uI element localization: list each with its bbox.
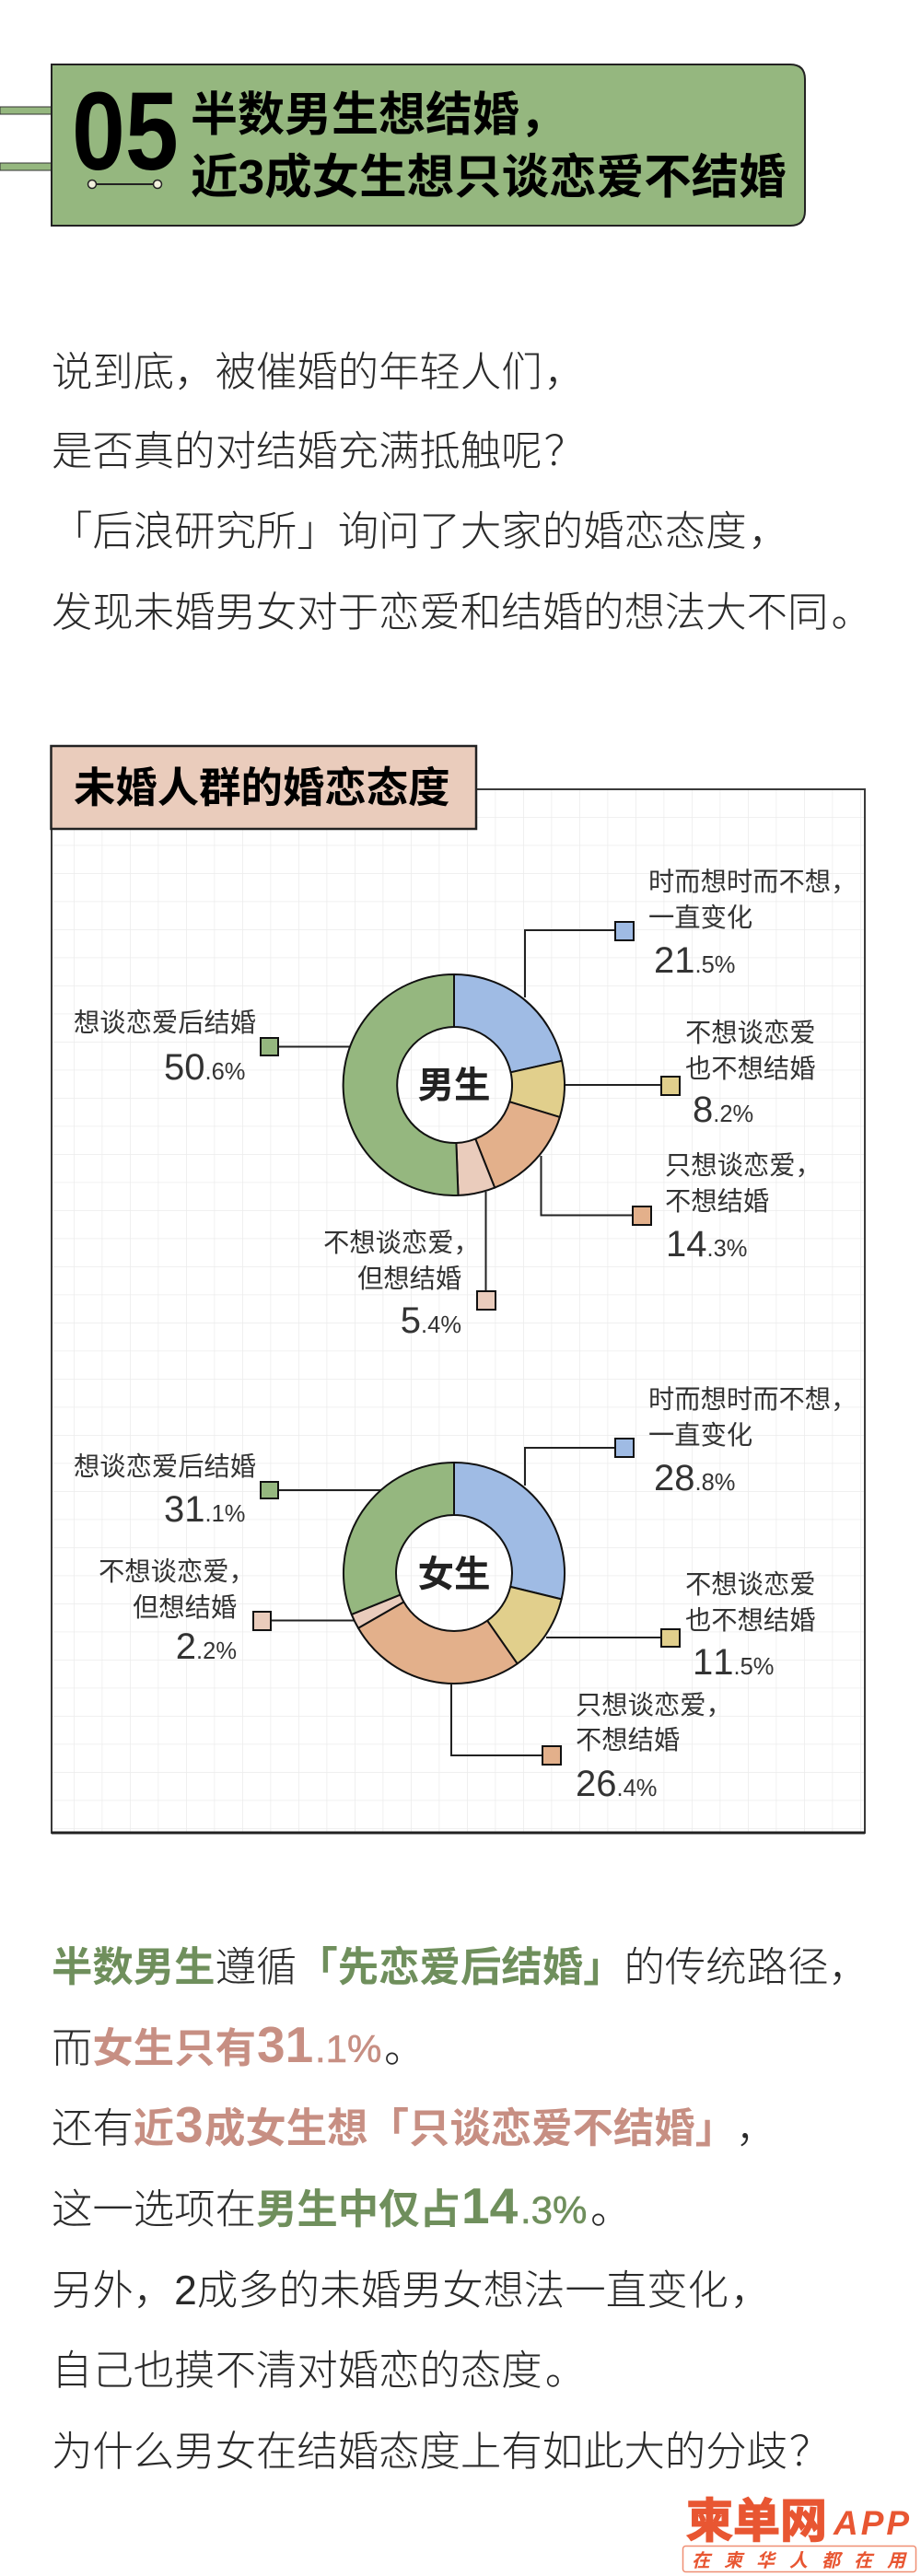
conclusion text: 自己也摸不清对婚恋的态度。 xyxy=(52,2349,586,2394)
male connector lines xyxy=(278,930,661,1291)
male legend: love only: 只想谈恋爱， xyxy=(665,1150,822,1180)
intro text: 发现未婚男女对于恋爱和结婚的想法大不同。 xyxy=(52,590,872,635)
number underline ornament xyxy=(88,181,162,188)
male legend: marriage only: 不想谈恋爱， xyxy=(323,1228,480,1257)
female legend: marriage only: 但想结婚 xyxy=(133,1592,237,1622)
female legend: no love no marriage xyxy=(661,1569,816,1683)
conclusion text: ， xyxy=(736,2106,777,2151)
watermark logo: 在 xyxy=(692,2551,713,2571)
male donut label: 男生 xyxy=(418,1066,490,1106)
female legend: love only: 只想谈恋爱， xyxy=(576,1690,732,1719)
panel: marital attitudes chart xyxy=(52,746,865,1833)
conclusion text: 成女生想「只谈恋爱不结婚」 xyxy=(204,2106,736,2151)
conclusion text: 另外，2成多的未婚男女想法一直变化， xyxy=(52,2268,771,2314)
male legend: love then marriage: 想谈恋爱后结婚 xyxy=(74,1008,256,1037)
conclusion text: 。 xyxy=(590,2187,631,2232)
conclusion text: .3% xyxy=(520,2188,587,2232)
male legend: love then marriage: 50.6% xyxy=(164,1047,245,1088)
intro text: 是否真的对结婚充满抵触呢？ xyxy=(52,429,585,474)
male legend: no love no marriage: 也不想结婚 xyxy=(685,1054,816,1083)
panel heading xyxy=(52,746,476,829)
female legend: sometimes want marriage: 28.8% xyxy=(654,1458,735,1498)
watermark logo: 在 xyxy=(854,2551,875,2571)
conclusion text xyxy=(52,1945,869,2475)
watermark logo xyxy=(683,2495,915,2571)
male legend: sometimes want marriage: 时而想时而不想， xyxy=(648,867,857,896)
intro text: 「后浪研究所」询问了大家的婚恋态度， xyxy=(52,509,789,554)
female legend: love only: 26.4% xyxy=(576,1764,657,1804)
male legend: love then marriage xyxy=(74,1008,278,1088)
intro text: 说到底，被催婚的年轻人们， xyxy=(52,350,585,395)
header title xyxy=(191,88,787,204)
header title: 半数男生想结婚， xyxy=(191,88,566,141)
male legend: no love no marriage: 8.2% xyxy=(693,1090,753,1130)
female legend: sometimes want marriage: 一直变化 xyxy=(648,1420,752,1450)
male legend: love only xyxy=(633,1150,822,1265)
watermark logo: 人 xyxy=(789,2551,808,2571)
male legend: no love no marriage xyxy=(661,1018,816,1130)
header title: 近3成女生想只谈恋爱不结婚 xyxy=(191,150,787,204)
conclusion text: 还有近 xyxy=(52,2106,174,2151)
female legend: love then marriage xyxy=(74,1451,278,1530)
male legend: marriage only: 但想结婚 xyxy=(357,1264,461,1293)
watermark logo: 柬 xyxy=(724,2551,745,2571)
female connector lines xyxy=(271,1448,661,1755)
watermark logo: APP xyxy=(833,2504,912,2542)
male donut chart xyxy=(344,974,565,1195)
female legend: no love no marriage: 11.5% xyxy=(693,1642,774,1683)
male legend: marriage only xyxy=(323,1228,495,1341)
female legend: sometimes want marriage xyxy=(615,1384,857,1498)
male legend: sometimes want marriage: 21.5% xyxy=(654,940,735,981)
watermark logo: 柬单网 xyxy=(686,2495,827,2547)
female legend: marriage only: 2.2% xyxy=(176,1626,237,1667)
male legend: no love no marriage: 不想谈恋爱 xyxy=(685,1018,816,1047)
female legend: marriage only: 不想谈恋爱， xyxy=(99,1556,255,1586)
conclusion text: 为什么男女在结婚态度上有如此大的分歧？ xyxy=(52,2430,830,2475)
female legend: marriage only xyxy=(99,1556,271,1667)
conclusion text: 3 xyxy=(175,2096,204,2153)
conclusion text: 而女生只有 xyxy=(52,2026,256,2071)
male legend: love only: 14.3% xyxy=(666,1224,747,1265)
watermark logo: 用 xyxy=(887,2551,907,2571)
section number 05: 05 xyxy=(72,69,179,193)
conclusion text: .1% xyxy=(315,2027,381,2070)
male legend: sometimes want marriage xyxy=(615,867,857,981)
male legend: love only: 不想结婚 xyxy=(665,1186,769,1216)
female legend: no love no marriage: 也不想结婚 xyxy=(685,1605,816,1635)
watermark logo: 都 xyxy=(822,2551,844,2571)
male legend: marriage only: 5.4% xyxy=(401,1300,461,1341)
conclusion text: 14 xyxy=(461,2177,519,2234)
female donut label: 女生 xyxy=(418,1555,490,1595)
female legend: love only xyxy=(542,1690,732,1804)
conclusion text: 。 xyxy=(384,2026,425,2071)
female donut chart xyxy=(344,1463,565,1684)
female legend: no love no marriage: 不想谈恋爱 xyxy=(685,1569,816,1599)
conclusion text: 这一选项在男生中仅占 xyxy=(52,2187,460,2232)
female legend: love then marriage: 想谈恋爱后结婚 xyxy=(74,1451,256,1481)
conclusion text: 半数男生遵循「先恋爱后结婚」的传统路径， xyxy=(52,1945,869,1990)
watermark logo: 华 xyxy=(756,2550,777,2571)
female legend: love only: 不想结婚 xyxy=(576,1725,680,1754)
header banner xyxy=(0,64,805,226)
panel heading: 未婚人群的婚恋态度 xyxy=(74,764,450,811)
male legend: sometimes want marriage: 一直变化 xyxy=(648,903,752,932)
conclusion text: 31 xyxy=(257,2016,313,2073)
female legend: sometimes want marriage: 时而想时而不想， xyxy=(648,1384,857,1414)
intro text xyxy=(52,350,872,635)
female legend: love then marriage: 31.1% xyxy=(164,1489,245,1530)
